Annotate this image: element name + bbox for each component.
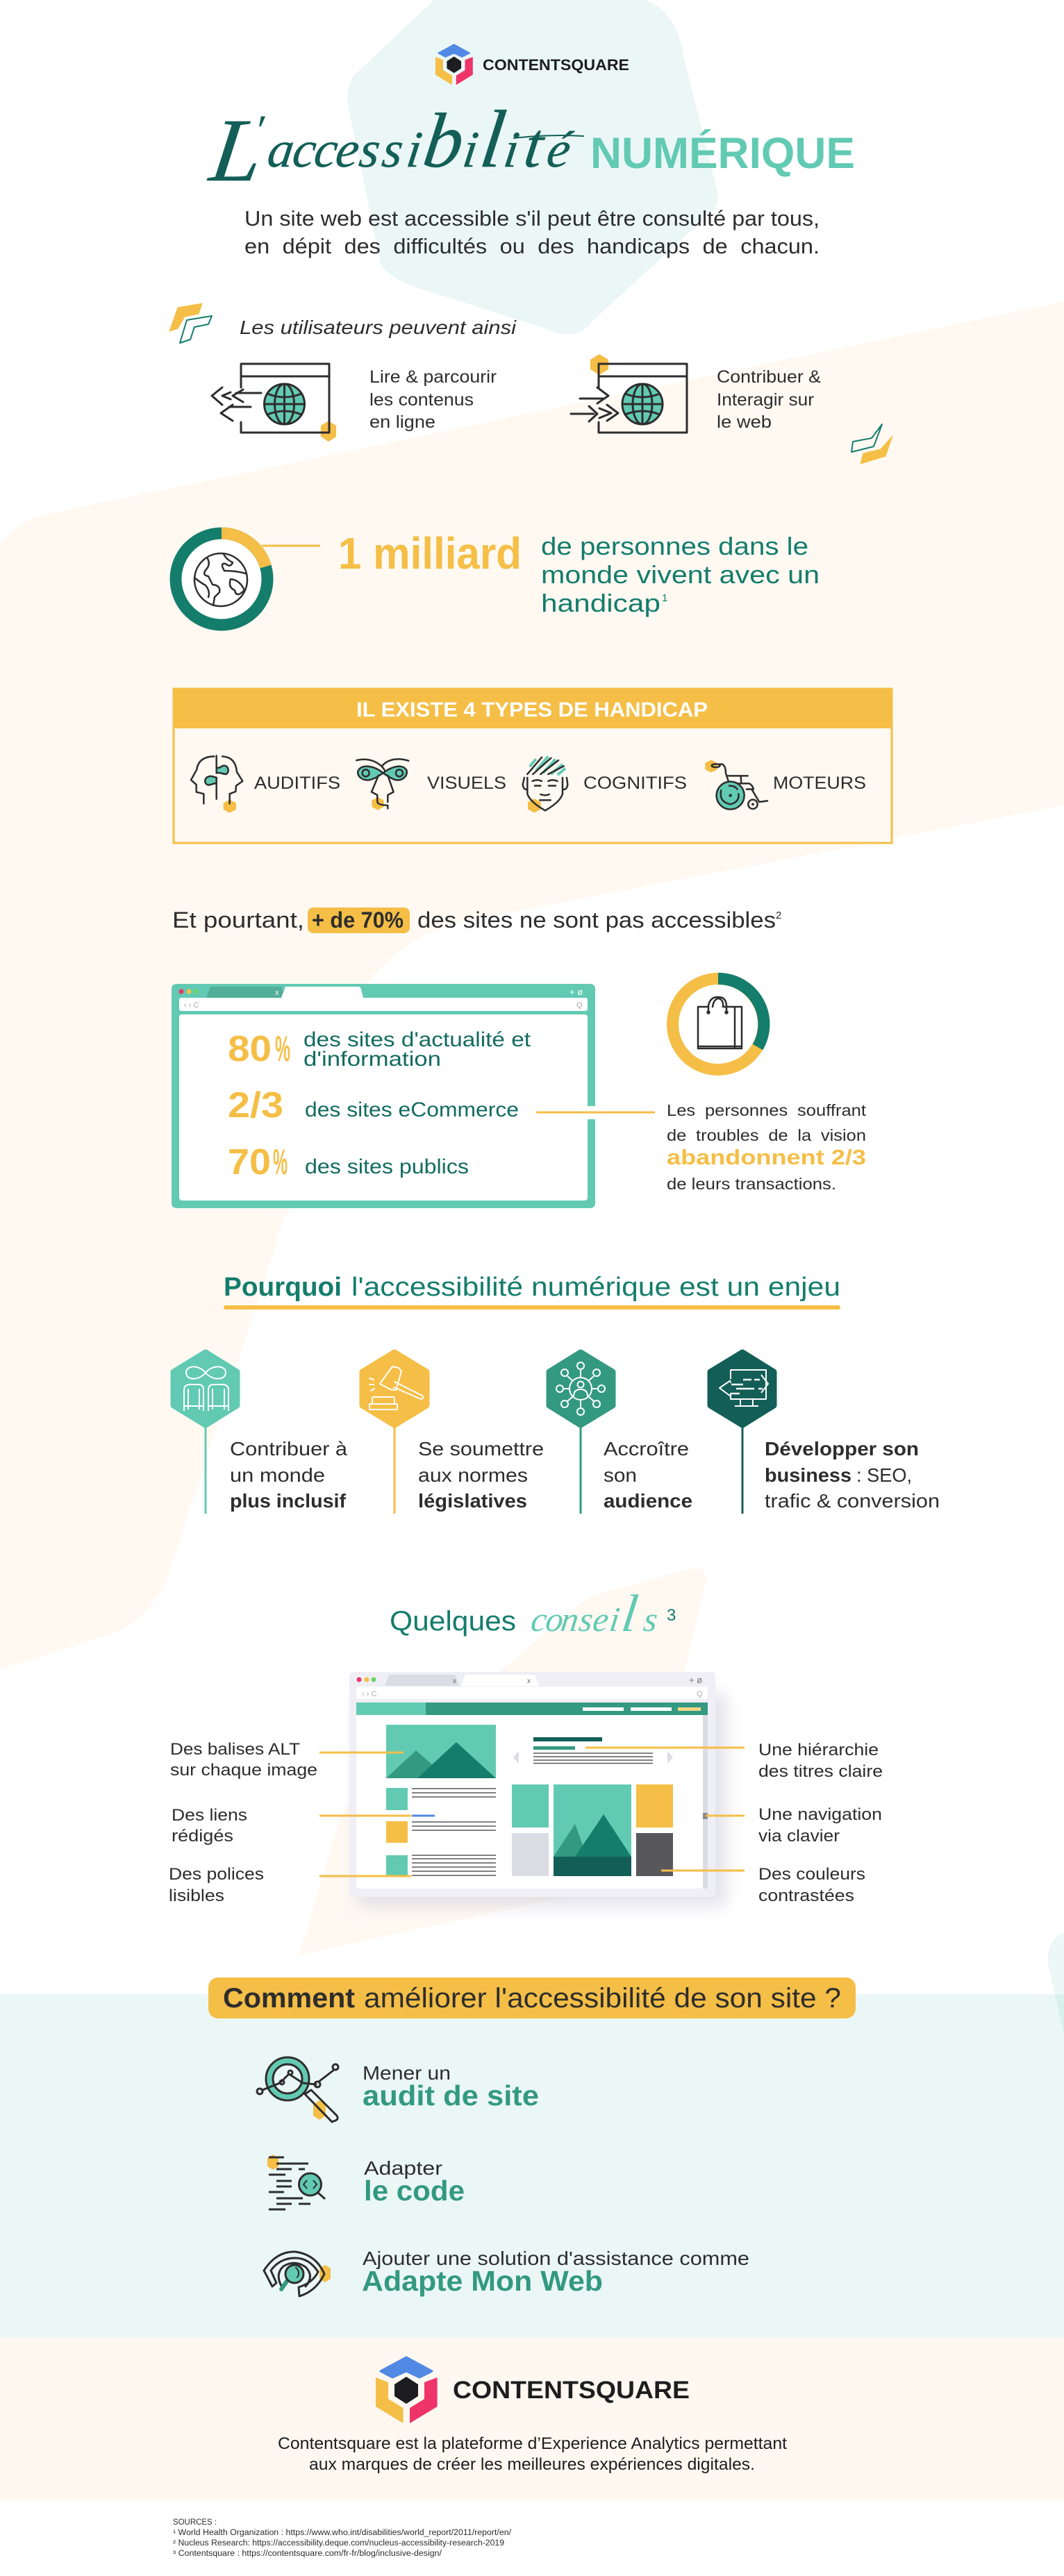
icon: earth xyxy=(194,553,247,606)
step text xyxy=(362,2248,749,2297)
sources: SOURCES : xyxy=(173,2518,217,2527)
callout: hiérarchie xyxy=(758,1741,883,1781)
reason text: son xyxy=(604,1464,637,1486)
browser mockup: x xyxy=(527,1678,531,1685)
step text: le code xyxy=(364,2175,465,2207)
background: teal blob right edge xyxy=(1047,1932,1064,2034)
heading pill: comment améliorer: Comment xyxy=(223,1983,355,2014)
step 2: code xyxy=(267,2155,465,2209)
callout text: transactions xyxy=(667,1101,867,1193)
heading: types: IL EXISTE 4 TYPES DE HANDICAP xyxy=(356,699,708,721)
reason 2: legal xyxy=(363,1353,544,1514)
background: teal footer band xyxy=(0,1994,1064,2337)
script word: s xyxy=(641,1600,660,1639)
browser contribute text: le web xyxy=(717,412,772,432)
sources: ² Nucleus Research: https://accessibility.deque.com/nucleus-accessibility-research-2019 xyxy=(173,2539,504,2548)
stat: two thirds: des sites eCommerce xyxy=(305,1098,519,1121)
background: cream footer band xyxy=(0,2337,1064,2500)
script word: o xyxy=(543,1600,566,1639)
stat description xyxy=(541,532,820,617)
icon: monitor arrows xyxy=(720,1370,768,1406)
stat description: handicap xyxy=(541,589,660,617)
stat: two thirds: 2/3 xyxy=(228,1085,283,1126)
donut chart: 1 billion xyxy=(176,533,320,625)
script word: l xyxy=(618,1584,641,1643)
logo bottom xyxy=(376,2357,438,2423)
title xyxy=(203,94,855,201)
callout: balises ALT: Des balises ALT xyxy=(170,1740,300,1759)
logo top xyxy=(435,44,473,85)
callout text: transactions: de troubles de la vision xyxy=(667,1126,866,1144)
callout: polices: lisibles xyxy=(169,1887,224,1905)
callout: navigation xyxy=(758,1805,882,1846)
browser mockup: + ø xyxy=(689,1675,702,1685)
stat: two thirds xyxy=(228,1085,519,1126)
browser contribute text xyxy=(717,367,821,432)
callout lines xyxy=(319,1748,745,1876)
browser contribute text: Interagir sur xyxy=(717,390,814,410)
title script part: s xyxy=(356,122,384,178)
subtitle: Un site web est accessible s'il peut être consulté par tous, xyxy=(244,206,820,231)
icon: face xyxy=(523,756,567,813)
stat: 80 percent: d'information xyxy=(304,1048,441,1071)
step text: audit de site xyxy=(363,2080,539,2111)
step text: Mener un xyxy=(363,2062,451,2084)
panel: browser statistics: Q xyxy=(576,1001,583,1010)
subtitle xyxy=(244,206,820,258)
icon: infinity chairs xyxy=(184,1366,228,1411)
step text: Adapter xyxy=(364,2157,442,2179)
step text: Ajouter une solution d'assistance comme xyxy=(363,2248,749,2269)
script word: i xyxy=(607,1600,622,1639)
subtitle: en dépit des difficultés ou des handicaps de chacun. xyxy=(244,234,820,258)
reason text: business xyxy=(765,1464,851,1486)
callout: polices: Des polices xyxy=(169,1865,264,1884)
label: cognitifs: COGNITIFS xyxy=(583,773,687,793)
callout: couleurs xyxy=(758,1865,865,1905)
callout: navigation: via clavier xyxy=(758,1827,840,1846)
panel: browser statistics: ‹ › C xyxy=(184,1001,199,1010)
title script part: L xyxy=(203,101,269,201)
company description xyxy=(278,2434,787,2474)
logo wordmark bottom: CONTENTSQUARE xyxy=(453,2377,690,2404)
stat: 70 percent: % xyxy=(273,1142,288,1182)
background: teal blob behind title xyxy=(347,0,718,335)
reason text: audience xyxy=(604,1490,692,1512)
heading: pourquoi: Pourquoi xyxy=(224,1273,342,1302)
company description: aux marques de créer les meilleures expériences digitales. xyxy=(309,2455,755,2474)
heading: quelques conseils: 3 xyxy=(667,1606,676,1625)
title script part: b xyxy=(418,98,469,184)
panel: browser statistics: + ø xyxy=(570,987,583,997)
heading: quelques conseils xyxy=(390,1584,676,1643)
title script part: s xyxy=(379,122,407,178)
label: visuels: VISUELS xyxy=(427,773,506,793)
callout: polices xyxy=(169,1865,264,1905)
title script part: e xyxy=(333,122,363,178)
reason text: trafic & conversion xyxy=(765,1490,940,1512)
reason text: législatives xyxy=(418,1490,527,1512)
label: auditifs: AUDITIFS xyxy=(254,773,340,793)
icon: wheelchair xyxy=(705,760,767,810)
browser mockup: ‹ › C xyxy=(362,1690,376,1698)
script word: c xyxy=(529,1600,549,1639)
callout text: transactions: abandonnent 2/3 xyxy=(667,1145,866,1169)
sources: ³ Contentsquare : https://contentsquare.com/fr-fr/blog/inclusive-design/ xyxy=(173,2550,442,2558)
panel: browser statistics xyxy=(172,984,595,1208)
image placeholder xyxy=(386,1725,496,1778)
reason 3: audience xyxy=(549,1353,692,1514)
reason text: aux normes xyxy=(418,1464,528,1486)
headline: 70 percent xyxy=(172,908,781,933)
badge: plus de 70: + de 70% xyxy=(312,908,404,932)
step 1: audit xyxy=(257,2057,539,2122)
title script part: t xyxy=(520,110,549,181)
browser read text xyxy=(369,367,497,432)
callout line xyxy=(536,1111,655,1114)
stat description: de personnes dans le xyxy=(541,532,808,560)
headline: 70 percent: Et pourtant, xyxy=(172,908,304,932)
article headings xyxy=(513,1737,673,1764)
title script part: é xyxy=(544,122,576,178)
image grid xyxy=(512,1784,673,1876)
title script part: i xyxy=(460,122,482,178)
heading pill: comment améliorer xyxy=(208,1977,856,2018)
stat: 70 percent: des sites publics xyxy=(305,1155,469,1178)
reason text: Développer son xyxy=(765,1438,919,1460)
background: cream blob behind tips xyxy=(299,1568,706,1955)
icon: code magnifier xyxy=(267,2155,325,2209)
reason 4: business xyxy=(710,1353,940,1514)
reason text: Contribuer à xyxy=(230,1438,347,1460)
stat description: monde vivent avec un xyxy=(541,560,820,589)
callout: couleurs: contrastées xyxy=(758,1887,854,1905)
panel: browser statistics: x xyxy=(275,989,279,997)
title script part: i xyxy=(501,122,523,178)
stat: 1 milliard: 1 milliard xyxy=(338,528,522,578)
browser read text: en ligne xyxy=(369,412,435,432)
stat: 80 percent: 80 xyxy=(228,1029,272,1069)
browser contribute text: Contribuer & xyxy=(717,367,821,387)
browser read text: les contenus xyxy=(369,390,474,410)
reason text: Se soumettre xyxy=(418,1438,544,1460)
icon: browser globe contribute xyxy=(571,354,687,433)
logo wordmark top: CONTENTSQUARE xyxy=(483,56,629,74)
callout: navigation: Une navigation xyxy=(758,1805,882,1824)
script word: s xyxy=(576,1600,596,1639)
sources xyxy=(173,2518,512,2558)
stat: 80 percent: des sites d'actualité et xyxy=(304,1028,531,1051)
stat: 70 percent: 70 xyxy=(228,1142,271,1182)
step text xyxy=(364,2157,465,2207)
icon: corner mark bottom right xyxy=(851,424,892,464)
stat description: 1 xyxy=(662,592,667,604)
callout: liens: Des liens xyxy=(172,1806,247,1825)
stat: 80 percent xyxy=(228,1028,531,1071)
callout: liens: rédigés xyxy=(172,1827,233,1846)
script word: e xyxy=(590,1600,611,1639)
icon: gavel xyxy=(369,1366,423,1410)
title script part: a xyxy=(265,122,298,178)
label: moteurs: MOTEURS xyxy=(773,773,866,793)
step text xyxy=(363,2062,539,2111)
callout: balises ALT xyxy=(170,1740,317,1780)
headline: 70 percent: des sites ne sont pas accessibles xyxy=(417,908,776,932)
reason text: Accroître xyxy=(604,1438,689,1460)
title script part: l xyxy=(475,94,511,185)
callout: hiérarchie: des titres claire xyxy=(758,1762,883,1781)
reason 1: inclusive xyxy=(174,1353,347,1514)
icon: browser globe read xyxy=(212,364,336,442)
donut chart: transactions xyxy=(672,978,764,1069)
callout: hiérarchie: Une hiérarchie xyxy=(758,1741,879,1759)
reason text xyxy=(230,1438,347,1512)
callout: liens xyxy=(172,1806,247,1846)
browser mockup xyxy=(349,1672,726,1906)
stat: 80 percent: % xyxy=(275,1029,290,1069)
icon: network xyxy=(556,1362,605,1415)
heading: quelques conseils: Quelques xyxy=(390,1606,516,1637)
icon: magnifier chart xyxy=(257,2057,338,2122)
sources: ¹ World Health Organization : https://www.who.int/disabilities/world_report/2011/report/en/ xyxy=(173,2529,512,2537)
step text: Adapte Mon Web xyxy=(362,2265,603,2297)
reason text: plus inclusif xyxy=(230,1490,347,1512)
background: cream diagonal band xyxy=(0,301,1064,1669)
site nav bar xyxy=(356,1703,708,1715)
panel: types of handicap xyxy=(173,688,892,843)
icon: eye magnifier xyxy=(264,2252,331,2296)
reason text xyxy=(418,1438,544,1512)
icon: corner mark top left xyxy=(169,303,212,343)
title script part: c xyxy=(311,122,342,178)
title script part: c xyxy=(290,122,320,178)
title script part: i xyxy=(404,122,426,178)
heading: pourquoi xyxy=(224,1273,840,1310)
icon: head puzzle xyxy=(191,755,242,813)
browser mockup: x xyxy=(453,1678,456,1685)
callout: couleurs: Des couleurs xyxy=(758,1865,865,1884)
reason text xyxy=(604,1438,692,1512)
t crossbar flourish xyxy=(514,135,583,138)
browser read text: Lire & parcourir xyxy=(369,367,497,387)
callout text: transactions: de leurs transactions. xyxy=(667,1175,836,1193)
step 3: adapte mon web xyxy=(264,2248,749,2297)
headline: 70 percent: 2 xyxy=(776,910,781,921)
title script part: ' xyxy=(251,107,267,153)
heading: pourquoi: l'accessibilité numérique est un enjeu xyxy=(351,1273,840,1302)
company description: Contentsquare est la plateforme d’Experience Analytics permettant xyxy=(278,2434,787,2453)
callout text: transactions: Les personnes souffrant xyxy=(667,1101,867,1119)
script word: n xyxy=(558,1600,581,1639)
title bold part: NUMÉRIQUE xyxy=(590,129,855,178)
users intro text: Les utilisateurs peuvent ainsi xyxy=(240,317,517,338)
heading pill: comment améliorer: améliorer l'accessibilité de son site ? xyxy=(364,1983,841,2014)
reason text: : SEO, xyxy=(856,1464,912,1486)
reason text: un monde xyxy=(230,1464,325,1486)
icon: shopping bag xyxy=(698,997,742,1048)
icon: eyes xyxy=(356,759,408,810)
callout: balises ALT: sur chaque image xyxy=(170,1761,317,1780)
stat: 70 percent xyxy=(228,1142,469,1182)
article list xyxy=(386,1788,496,1876)
browser mockup: Q xyxy=(697,1690,703,1698)
reason text xyxy=(765,1438,940,1512)
